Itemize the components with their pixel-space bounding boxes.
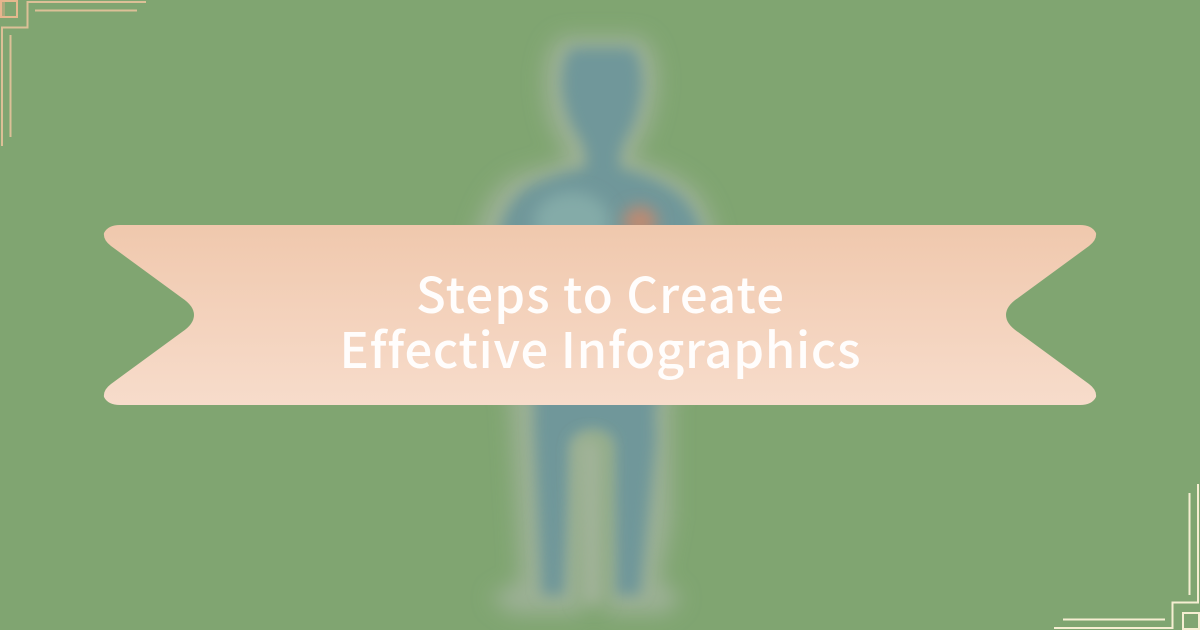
blurred human figure xyxy=(472,36,716,614)
ribbon banner xyxy=(104,225,1096,405)
title xyxy=(340,257,860,383)
figure leg gap highlight xyxy=(574,435,606,605)
corner ornament: top left xyxy=(0,0,146,146)
title: Steps to Create xyxy=(416,257,784,328)
corner ornament: bottom right xyxy=(1054,484,1199,629)
title: Effective Infographics xyxy=(340,312,860,383)
ribbon shape xyxy=(104,225,1096,405)
figure halo xyxy=(472,36,716,614)
figure heart xyxy=(623,206,657,238)
figure body xyxy=(498,48,702,595)
figure chest highlight xyxy=(534,192,610,252)
